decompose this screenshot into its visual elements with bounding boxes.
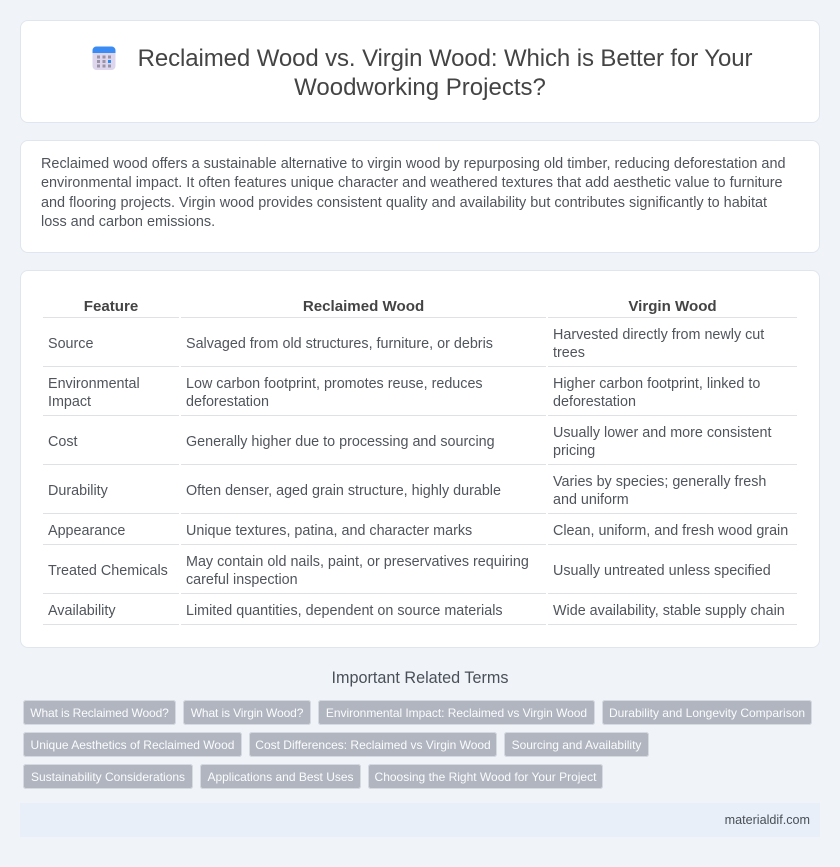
text: introduction paragraph: and flooring projects. Virgin wood provides consistent quality and availability but contributes significantly to habitat (41, 195, 767, 211)
tag (183, 700, 311, 725)
row: Environmental Impact: deforestation (186, 394, 269, 410)
row: Cost: Cost (48, 434, 78, 450)
tag: Sustainability Considerations (31, 770, 185, 784)
row: Environmental Impact: Environmental (48, 376, 140, 392)
row: Source: trees (553, 345, 585, 361)
text: introduction paragraph: environmental impact. It often features unique character and weathered textures that add aesthetic value to furniture (41, 175, 783, 191)
panel: comparison table (20, 270, 820, 648)
row: Appearance: Clean, uniform, and fresh wood grain (553, 523, 788, 539)
row: Cost: Usually lower and more consistent (553, 425, 771, 441)
heading: page title (138, 45, 752, 101)
row: Durability: Varies by species; generally fresh (553, 474, 766, 490)
row: Source: Source (48, 336, 93, 352)
tag (368, 764, 603, 789)
row: Cost (48, 425, 772, 459)
text: introduction paragraph (41, 156, 786, 230)
row: Durability: and uniform (553, 492, 629, 508)
row: Treated Chemicals: Treated Chemicals (48, 563, 168, 579)
tag (200, 764, 361, 789)
footer bar (20, 803, 820, 837)
row: Durability: Often denser, aged grain structure, highly durable (186, 483, 501, 499)
tag: Durability and Longevity Comparison (609, 706, 805, 720)
icon: calendar grid (92, 46, 116, 70)
tag (318, 700, 595, 725)
row: Environmental Impact (48, 376, 760, 410)
tag (504, 732, 649, 757)
footer: site name: materialdif.com (725, 813, 810, 827)
tag: Cost Differences: Reclaimed vs Virgin Wood (255, 738, 491, 752)
heading: page title: Woodworking Projects? (294, 74, 546, 101)
panel: title header (20, 20, 820, 123)
row: Treated Chemicals: Usually untreated unless specified (553, 563, 771, 579)
row: Treated Chemicals: careful inspection (186, 572, 298, 588)
row: Appearance (48, 523, 788, 539)
header: Virgin Wood: Virgin Wood (628, 298, 717, 315)
row: Cost: Generally higher due to processing and sourcing (186, 434, 495, 450)
row: Environmental Impact: Low carbon footprint, promotes reuse, reduces (186, 376, 483, 392)
row: Cost: pricing (553, 443, 595, 459)
row: Availability: Availability (48, 603, 116, 619)
row: Durability (48, 474, 766, 508)
tag: Choosing the Right Wood for Your Project (375, 770, 596, 784)
heading: page title: Reclaimed Wood vs. Virgin Wood: Which is Better for Your (138, 45, 752, 72)
text: introduction paragraph: Reclaimed wood offers a sustainable alternative to virgin wood by repurposing old timber, reducing deforestation and (41, 156, 786, 172)
text: introduction paragraph: loss and carbon emissions. (41, 214, 215, 230)
tag: What is Reclaimed Wood? (30, 706, 169, 720)
tag (602, 700, 812, 725)
header: Reclaimed Wood: Reclaimed Wood (303, 298, 424, 315)
tag: Sourcing and Availability (512, 738, 641, 752)
row: Source: Salvaged from old structures, furniture, or debris (186, 336, 493, 352)
tag: Applications and Best Uses (207, 770, 354, 784)
tag: Unique Aesthetics of Reclaimed Wood (31, 738, 234, 752)
tag (23, 764, 193, 789)
row: Durability: Durability (48, 483, 108, 499)
row: Appearance: Appearance (48, 523, 125, 539)
table: comparison (43, 298, 797, 625)
panel: introduction (20, 140, 820, 253)
row: Availability: Limited quantities, dependent on source materials (186, 603, 503, 619)
row: Environmental Impact: Impact (48, 394, 91, 410)
row: Environmental Impact: Higher carbon footprint, linked to (553, 376, 760, 392)
heading: Important Related Terms: Important Related Terms (332, 669, 508, 687)
row: Source: Harvested directly from newly cut (553, 327, 764, 343)
row: Source (48, 327, 764, 361)
row: Treated Chemicals (48, 554, 771, 588)
tag (249, 732, 497, 757)
row: Environmental Impact: deforestation (553, 394, 636, 410)
tag list: related terms (23, 700, 812, 789)
row: Availability: Wide availability, stable supply chain (553, 603, 785, 619)
tag: Environmental Impact: Reclaimed vs Virgin Wood (326, 706, 587, 720)
tag (23, 732, 242, 757)
row: Appearance: Unique textures, patina, and character marks (186, 523, 472, 539)
row: Treated Chemicals: May contain old nails, paint, or preservatives requiring (186, 554, 529, 570)
row: Availability (48, 603, 785, 619)
tag: What is Virgin Wood? (191, 706, 303, 720)
header: Feature: Feature (84, 298, 138, 315)
tag (23, 700, 176, 725)
